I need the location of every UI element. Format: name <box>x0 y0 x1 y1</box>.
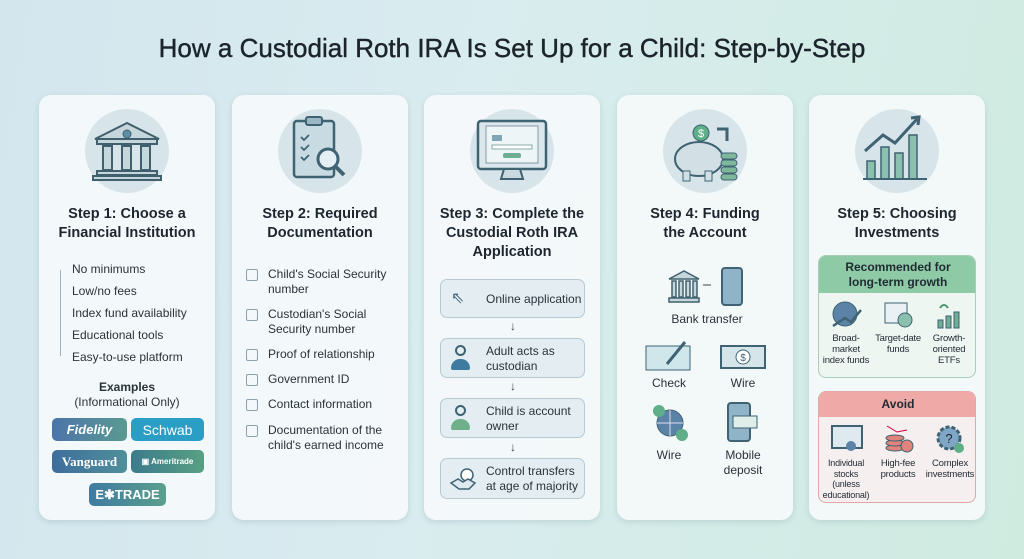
heading: the Account <box>663 225 747 241</box>
box: recommended: index funds <box>823 355 869 366</box>
heading <box>837 206 957 241</box>
box: recommended: ETFs <box>938 355 960 366</box>
method: wire international <box>653 405 688 462</box>
panel: step 4 <box>617 95 793 520</box>
logos: Fidelity <box>67 422 112 437</box>
box: avoid: stocks <box>834 468 858 478</box>
checklist: Custodian's Social <box>268 307 366 321</box>
icon: piggy bank <box>663 109 747 193</box>
method: mobile deposit <box>724 402 762 477</box>
flow: adult custodian: Adult acts as <box>486 344 555 358</box>
box: avoid: ? <box>945 431 953 446</box>
box: recommended: long-term growth <box>849 275 947 289</box>
heading: Documentation <box>267 225 373 241</box>
box: recommended: funds <box>887 344 909 355</box>
method: wire international: Wire <box>657 448 681 462</box>
logos <box>52 418 204 506</box>
flow: adult custodian: custodian <box>486 359 537 373</box>
logos: ▣ Ameritrade <box>142 457 193 466</box>
arrow: ↓ <box>510 319 516 333</box>
examples label: (Informational Only) <box>74 395 180 409</box>
method: wire <box>720 345 766 390</box>
heading: Custodial Roth IRA <box>446 225 578 241</box>
heading: Investments <box>855 225 939 241</box>
heading: Step 3: Complete the <box>440 206 584 222</box>
checklist: Contact information <box>268 397 372 411</box>
icon: computer <box>470 109 554 193</box>
checklist: Security number <box>268 322 355 336</box>
box: recommended: Recommended for <box>845 260 951 274</box>
flow: online application: Online application <box>486 292 581 306</box>
checklist: Proof of relationship <box>268 347 375 361</box>
flow: child owner <box>440 398 585 438</box>
method: mobile deposit: Mobile <box>725 448 761 462</box>
flow: child owner: owner <box>486 419 519 433</box>
list: criteria: No minimums <box>72 262 145 276</box>
heading: Step 5: Choosing <box>837 206 957 222</box>
list: criteria: Educational tools <box>72 328 163 342</box>
box: avoid: investments <box>926 469 974 480</box>
box: avoid: products <box>881 469 915 480</box>
checklist <box>246 267 386 452</box>
heading <box>59 206 195 241</box>
method: bank transfer <box>668 267 743 326</box>
method: wire: $ <box>740 353 746 364</box>
method: bank transfer: Bank transfer <box>671 312 743 326</box>
panel: step 3 <box>424 95 600 520</box>
arrow: ↓ <box>510 440 516 454</box>
icon: piggy bank: $ <box>698 128 704 140</box>
logos: E✱TRADE <box>95 486 160 502</box>
title: How a Custodial Roth IRA Is Set Up for a Child: Step-by-Step <box>159 33 865 63</box>
heading <box>262 206 378 241</box>
logos: Schwab <box>143 422 192 438</box>
box: recommended <box>818 255 976 378</box>
panel: step 1 <box>39 95 215 520</box>
list: criteria <box>60 262 187 364</box>
checklist: child's earned income <box>268 438 384 452</box>
panel: step 2 <box>232 95 408 520</box>
method: mobile deposit: deposit <box>724 463 762 477</box>
icon: growth chart <box>855 109 939 193</box>
box: recommended: oriented <box>933 344 965 355</box>
examples label: Examples <box>99 380 155 394</box>
icon: clipboard <box>278 109 362 193</box>
list: criteria: Index fund availability <box>72 306 187 320</box>
box: avoid <box>818 391 976 503</box>
box: avoid: (unless <box>832 479 860 489</box>
checklist: Child's Social Security <box>268 267 386 281</box>
arrow: ↓ <box>510 379 516 393</box>
heading <box>440 206 584 260</box>
flow: online application: ⇖ <box>451 290 464 307</box>
logos: Vanguard <box>62 454 117 468</box>
checklist: Documentation of the <box>268 423 382 437</box>
box: avoid: High-fee <box>881 458 915 469</box>
flow: control transfer: Control transfers <box>486 464 575 478</box>
method: check: Check <box>652 376 686 390</box>
list: criteria: Low/no fees <box>72 284 137 298</box>
box: recommended: Broad- <box>832 333 860 344</box>
heading: Step 4: Funding <box>650 206 760 222</box>
heading: Step 1: Choose a <box>68 206 186 222</box>
flow: child owner: Child is account <box>486 404 571 418</box>
checklist: Government ID <box>268 372 349 386</box>
heading: Step 2: Required <box>262 206 378 222</box>
heading: Application <box>473 244 551 260</box>
box: recommended: Growth- <box>933 333 965 344</box>
box: recommended: market <box>832 344 860 355</box>
box: avoid: Individual <box>828 458 864 468</box>
flow: control transfer <box>440 458 585 499</box>
box: recommended: Target-date <box>875 333 921 344</box>
heading: Financial Institution <box>59 225 195 241</box>
flow: adult custodian <box>440 338 585 378</box>
flow: online application <box>440 279 585 318</box>
box: avoid: educational) <box>823 490 869 500</box>
panel: step 5 <box>809 95 985 520</box>
icon: bank <box>85 109 169 193</box>
box: avoid: Complex <box>932 458 968 469</box>
flow: control transfer: at age of majority <box>486 479 578 493</box>
heading <box>650 206 760 241</box>
examples label <box>74 380 180 409</box>
method: wire: Wire <box>731 376 755 390</box>
method: check <box>646 341 690 390</box>
list: criteria: Easy-to-use platform <box>72 350 183 364</box>
box: avoid: Avoid <box>882 397 914 411</box>
checklist: number <box>268 282 309 296</box>
